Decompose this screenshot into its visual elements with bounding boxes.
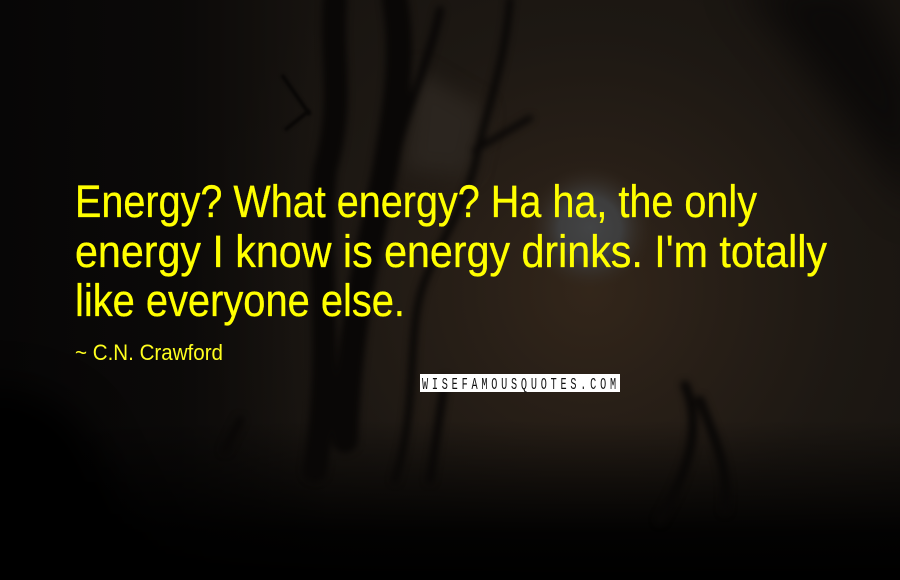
attribution: ~ C.N. Crawford	[75, 340, 223, 365]
quote line 2: energy I know is energy drinks. I'm totally	[75, 226, 827, 277]
watermark badge: WISEFAMOUSQUOTES.COM	[422, 376, 620, 395]
quote text	[75, 176, 827, 326]
quote line 3: like everyone else.	[75, 275, 405, 326]
quote line 1: Energy? What energy? Ha ha, the only	[75, 176, 757, 227]
